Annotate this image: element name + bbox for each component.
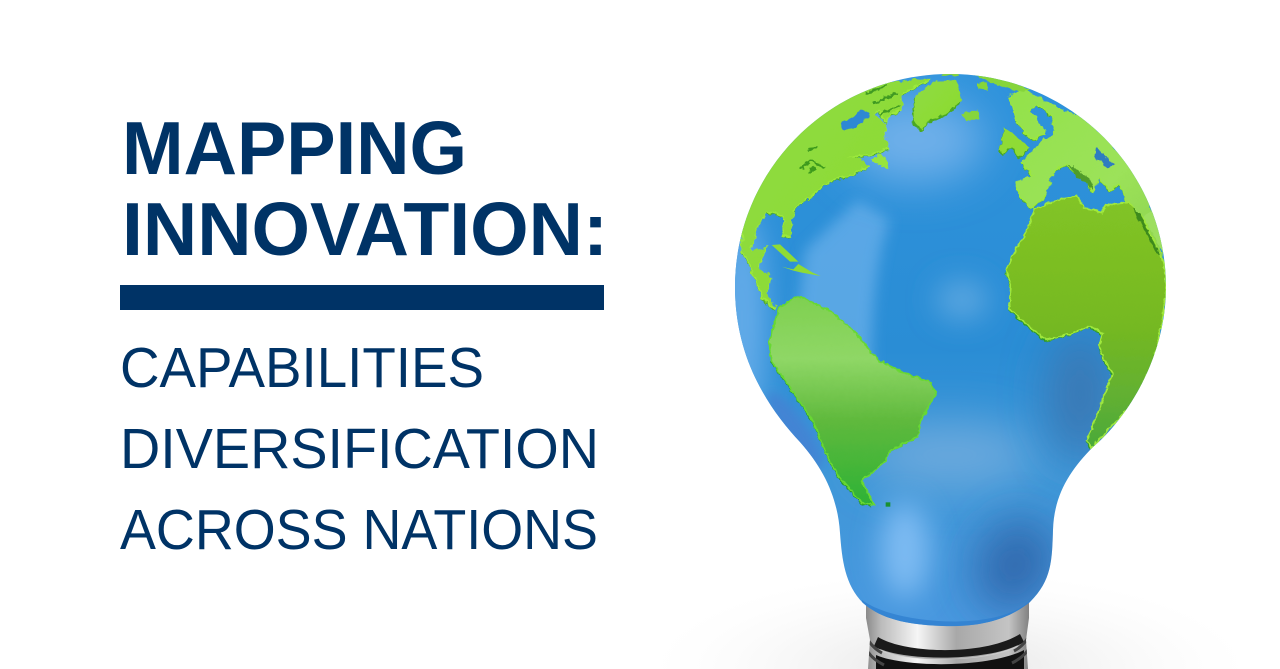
Britain <box>999 128 1030 159</box>
subtitle: Capabilities Diversification Across Nations <box>120 336 599 562</box>
title: Mapping Innovation: INNOVATION: <box>122 187 608 271</box>
continents on the globe <box>741 72 1167 507</box>
Greenland <box>912 80 962 133</box>
bulb glass body <box>735 74 1166 626</box>
floor shadow <box>650 560 1250 669</box>
title: Mapping Innovation: MAPPING <box>122 106 467 190</box>
small southern island <box>886 502 890 507</box>
title: Mapping Innovation <box>122 106 608 271</box>
North America <box>741 79 930 312</box>
Europe and Asia <box>1009 91 1163 263</box>
subtitle: Capabilities Diversification Across Nations: DIVERSIFICATION <box>120 417 599 481</box>
icon: globe light bulb <box>735 74 1166 626</box>
South America <box>769 297 935 506</box>
Africa <box>1005 196 1167 449</box>
Iceland, Svalbard and Arctic islands <box>942 72 1030 121</box>
divider bar <box>120 285 604 310</box>
subtitle: Capabilities Diversification Across Nations: ACROSS NATIONS <box>120 498 598 562</box>
subtitle: Capabilities Diversification Across Nations: CAPABILITIES <box>120 336 484 400</box>
Caribbean islands <box>772 244 821 276</box>
icon: metal bulb socket <box>866 603 1029 669</box>
